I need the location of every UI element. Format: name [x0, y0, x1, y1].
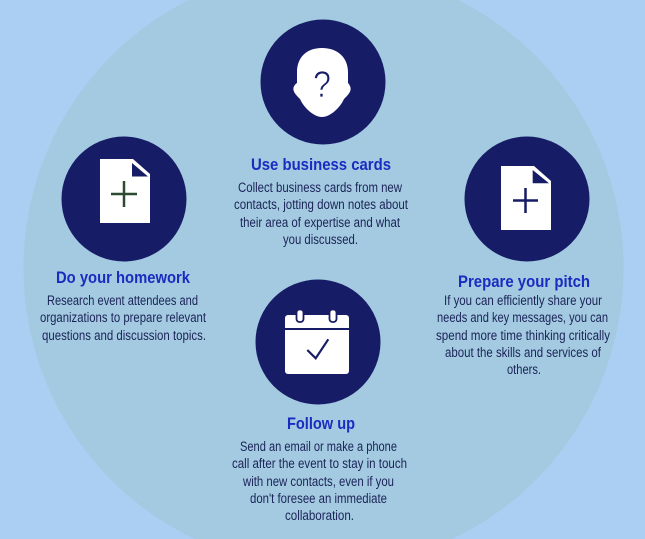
text: use business cards description: contacts, jotting down notes about	[234, 197, 408, 212]
text: prepare your pitch description: If you can efficiently share your	[444, 293, 602, 308]
text: follow up description: collaboration.	[285, 508, 354, 523]
text: follow up description: call after the event to stay in touch	[232, 456, 407, 471]
text: follow up description: don't foresee an immediate	[250, 491, 387, 506]
icon: head with question mark: ?	[313, 64, 331, 105]
text: use business cards description: Collect business cards from new	[238, 180, 402, 195]
text: use business cards description	[234, 180, 408, 247]
text: prepare your pitch description: needs and key messages, you can	[437, 310, 608, 325]
text: follow up description	[232, 439, 407, 523]
heading: use business cards: Use business cards	[251, 156, 391, 174]
text: do your homework description: Research event attendees and	[47, 293, 198, 308]
panel: follow up	[232, 280, 407, 523]
text: do your homework description: questions and discussion topics.	[42, 328, 206, 343]
icon: document with plus	[464, 136, 590, 262]
text: prepare your pitch description	[436, 293, 610, 377]
text: prepare your pitch description: spend more time thinking critically	[436, 328, 610, 343]
text: prepare your pitch description: others.	[507, 362, 541, 377]
heading: do your homework: Do your homework	[56, 269, 191, 287]
heading: follow up: Follow up	[287, 415, 355, 433]
icon: head with question mark	[260, 20, 386, 144]
text: use business cards description: you discussed.	[283, 232, 358, 247]
text: do your homework description	[40, 293, 206, 343]
heading: prepare your pitch: Prepare your pitch	[458, 273, 590, 291]
text: prepare your pitch description: about the skills and services of	[445, 345, 601, 360]
panel: use business cards	[234, 20, 408, 247]
text: do your homework description: organizations to prepare relevant	[40, 310, 206, 325]
panel: do your homework	[40, 136, 206, 343]
icon: document with plus	[62, 136, 186, 262]
icon: calendar with check mark	[256, 280, 380, 404]
panel: prepare your pitch	[436, 136, 610, 377]
text: follow up description: Send an email or make a phone	[240, 439, 397, 454]
text: use business cards description: their area of expertise and what	[240, 215, 400, 230]
text: follow up description: with new contacts, even if you	[242, 474, 394, 489]
